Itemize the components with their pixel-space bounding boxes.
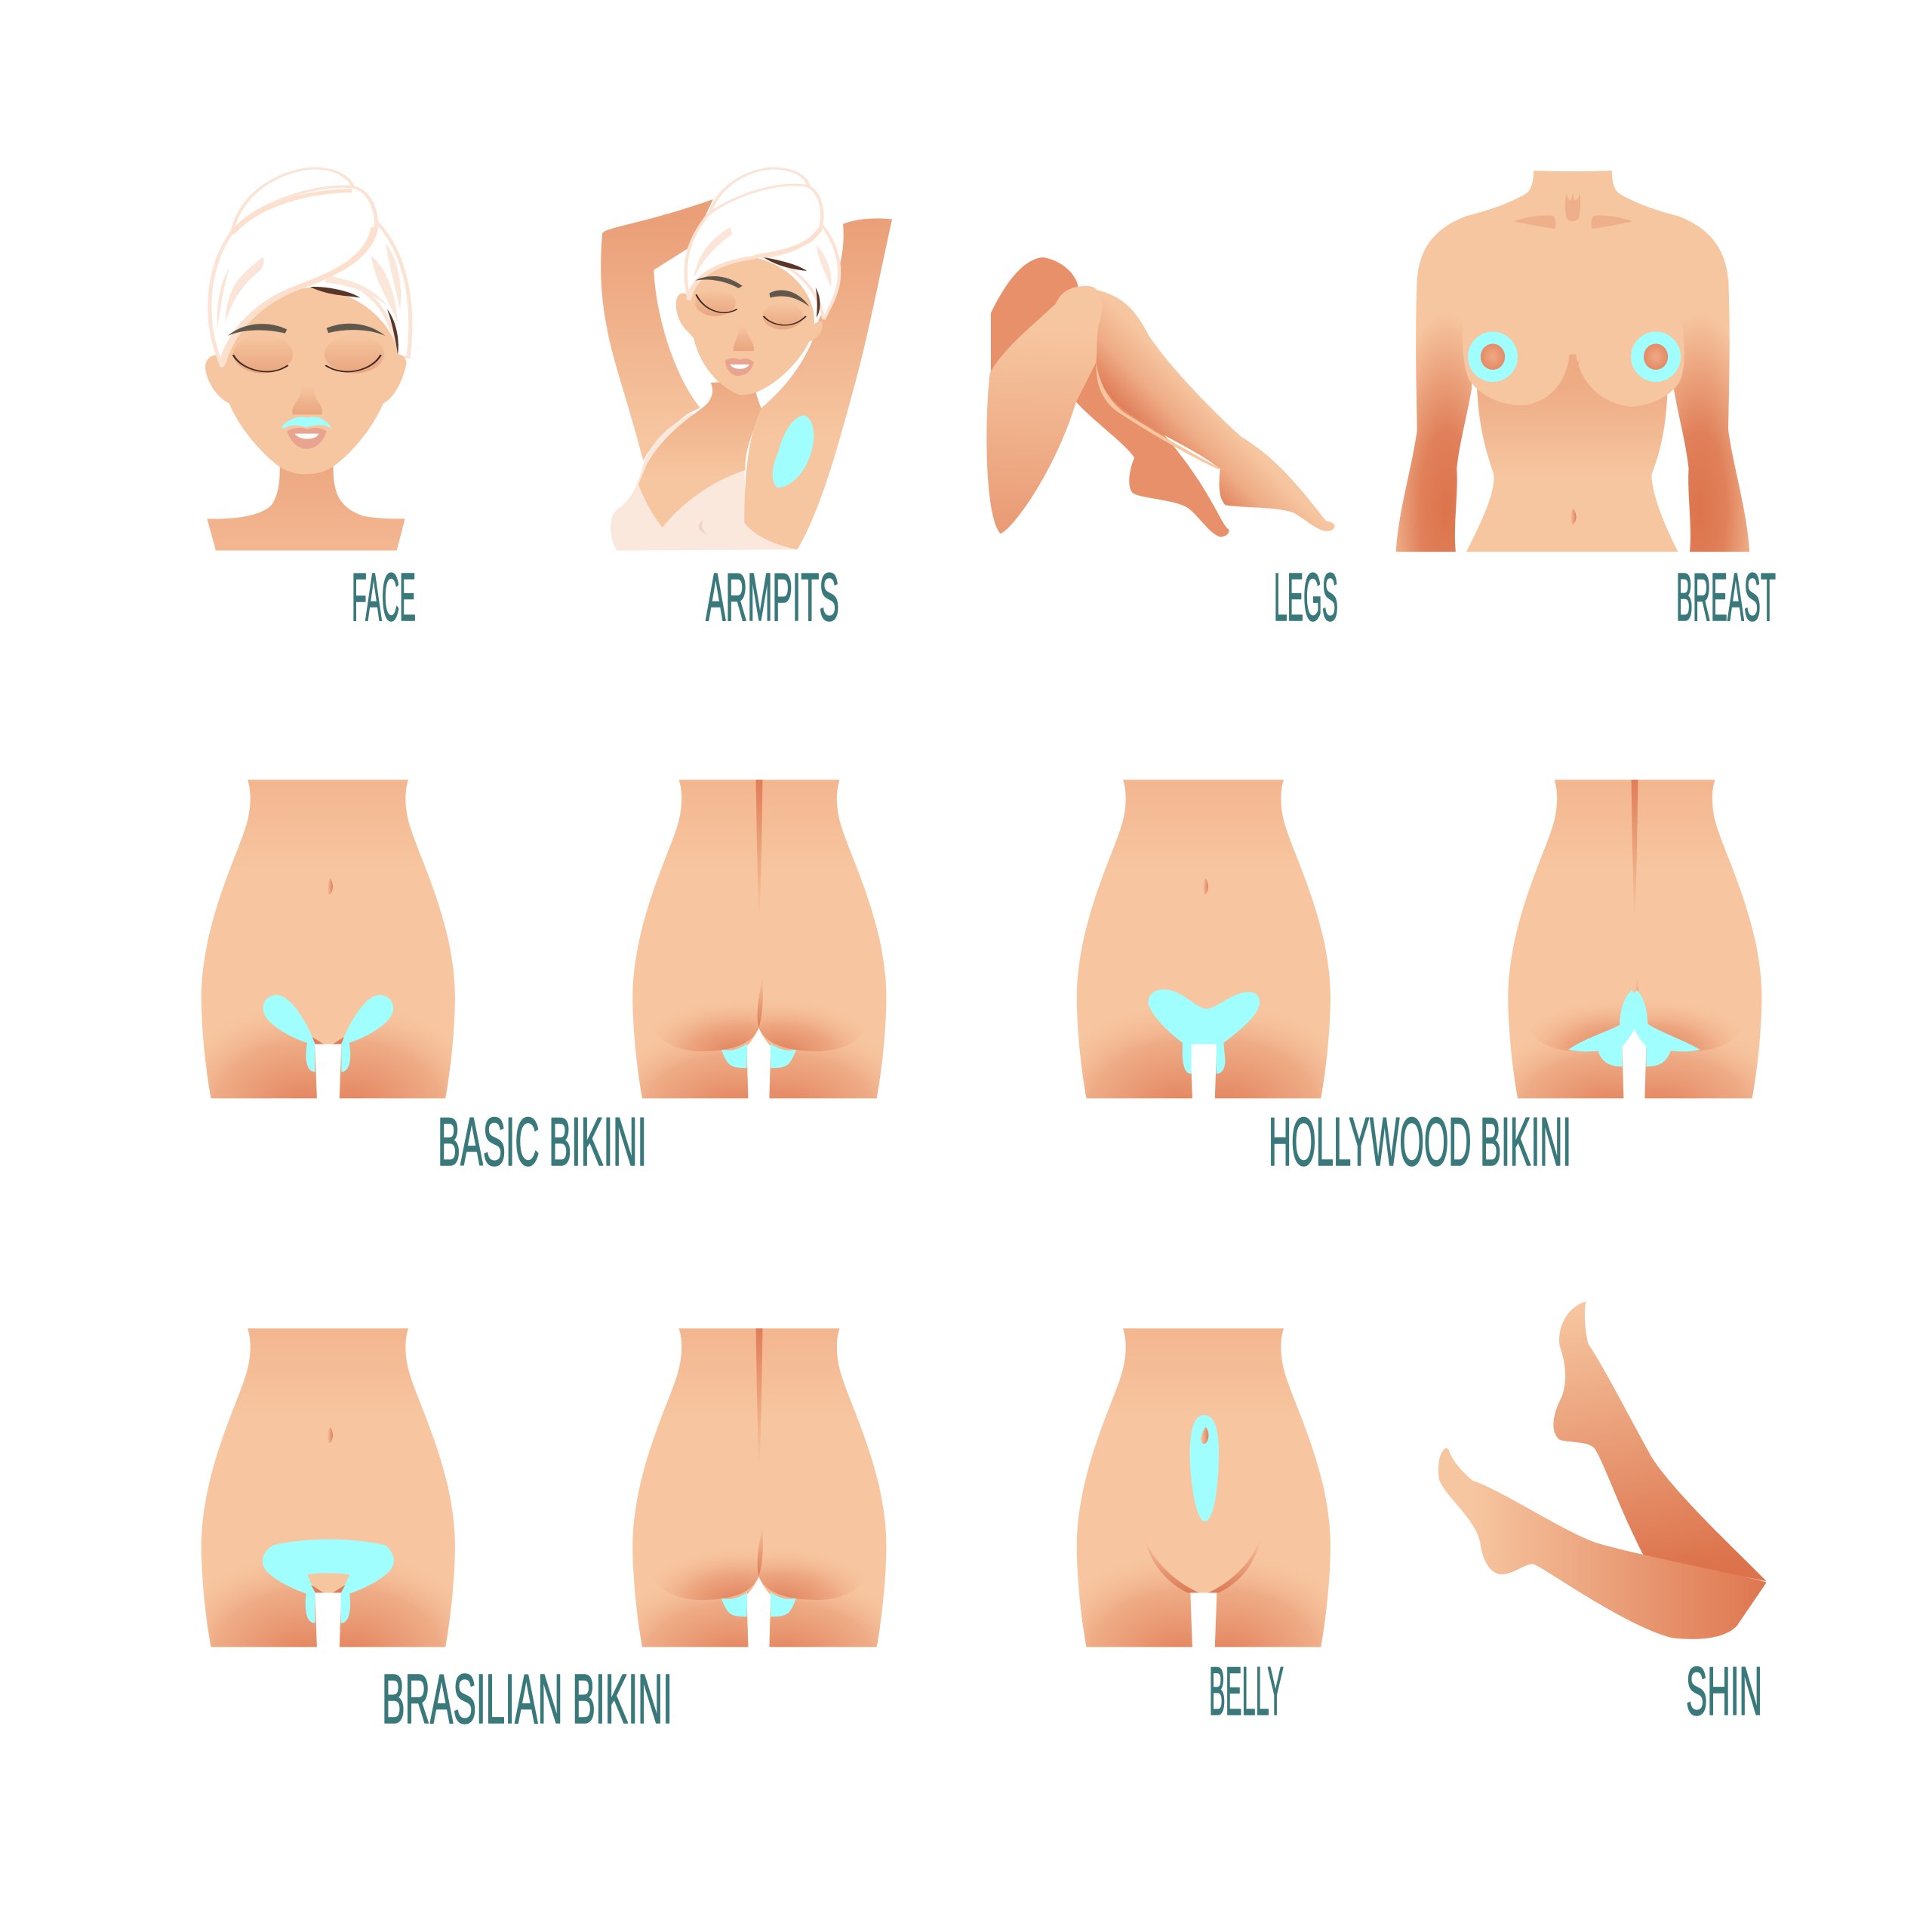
text: SHIN <box>1686 1654 1762 1730</box>
eyebrows <box>228 324 385 336</box>
text: BRASILIAN BIKINI <box>382 1660 672 1738</box>
wax rings <box>1468 331 1518 382</box>
figure: front view <box>155 780 501 1223</box>
hair <box>310 287 398 354</box>
figure: back view <box>586 1328 933 1751</box>
figure: back view <box>586 780 933 1202</box>
text: BELLY <box>1209 1654 1284 1730</box>
right arm <box>1670 278 1749 552</box>
text: HOLLYWOOD BIKINI <box>1269 1104 1571 1180</box>
figure: front view <box>155 1328 501 1771</box>
lips <box>287 428 327 449</box>
wax on upper lip <box>282 417 332 429</box>
cleavage <box>1568 354 1580 375</box>
chest and shoulders <box>1417 171 1728 407</box>
panel: armpits <box>601 168 892 550</box>
panel: legs <box>986 257 1335 537</box>
panel: brasilian bikini <box>155 1328 933 1771</box>
figure: front view with belly wax <box>1030 1328 1377 1771</box>
figure: woman with raised arms <box>601 168 892 550</box>
panel: face <box>205 168 411 550</box>
nose <box>292 386 322 414</box>
panel: hollywood bikini <box>1030 780 1808 1223</box>
panel: breast <box>1396 171 1749 552</box>
panel: belly <box>1030 1328 1377 1771</box>
eyelashes <box>233 355 381 371</box>
figure: crossed lower legs <box>1438 1302 1767 1639</box>
text: LEGS <box>1274 560 1338 635</box>
face skin <box>205 288 406 474</box>
text: ARMPITS <box>706 560 839 635</box>
figure: upper torso <box>1396 171 1749 552</box>
neck and collar marks <box>1514 192 1632 229</box>
left arm <box>1396 278 1475 552</box>
figure: back view <box>1461 780 1808 1202</box>
eyelids <box>233 335 293 374</box>
centres <box>1481 343 1505 370</box>
text: FACE <box>352 560 416 635</box>
neck <box>207 464 405 550</box>
wax on armpit <box>773 415 814 488</box>
panel: shin <box>1438 1302 1767 1639</box>
figure: bent legs <box>986 257 1335 537</box>
navel <box>1571 509 1576 525</box>
main towel wrap <box>210 186 377 367</box>
figure: head with towel <box>205 168 411 550</box>
panel: basic bikini <box>155 780 933 1223</box>
text: BASIC BIKINI <box>438 1104 647 1180</box>
midriff <box>1466 348 1678 552</box>
figure: front view <box>1030 780 1377 1223</box>
